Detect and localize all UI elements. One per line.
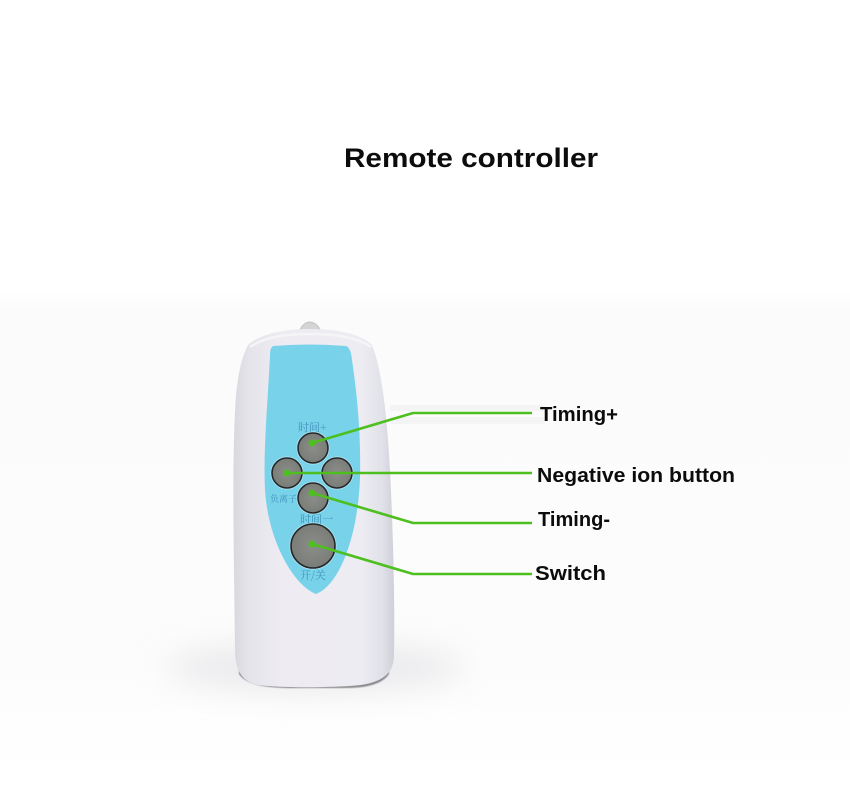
remote body <box>233 329 394 687</box>
button: timing plus <box>296 432 330 464</box>
leader line: negative ion <box>284 470 532 476</box>
leader line: timing minus <box>308 490 532 523</box>
chinese labels: 时间一 <box>300 511 333 527</box>
label: timing minus: Timing- <box>538 509 610 531</box>
blue panel <box>265 344 360 594</box>
label: negative ion button: Negative ion button <box>537 465 735 487</box>
button: switch <box>290 522 336 570</box>
top rim highlight <box>250 334 371 347</box>
chinese labels: 时间+ <box>298 419 326 435</box>
floor shadow <box>165 644 465 692</box>
label: switch: Switch <box>535 563 606 585</box>
title: Remote controller <box>344 143 598 173</box>
remote controller <box>233 322 394 688</box>
leader line: switch <box>308 540 532 574</box>
background <box>0 290 850 804</box>
button: negative ion left <box>270 456 304 490</box>
remote base shadow <box>239 668 389 688</box>
label: timing plus: Timing+ <box>540 404 618 426</box>
indicator light <box>299 322 321 332</box>
chinese labels: 负离子 <box>270 492 297 505</box>
chinese labels: 开/关 <box>300 567 326 583</box>
chinese labels <box>270 419 333 583</box>
watermark band <box>390 405 545 424</box>
leader line: timing plus <box>308 413 532 446</box>
button: negative ion right <box>320 456 354 490</box>
button: timing minus <box>296 482 330 514</box>
